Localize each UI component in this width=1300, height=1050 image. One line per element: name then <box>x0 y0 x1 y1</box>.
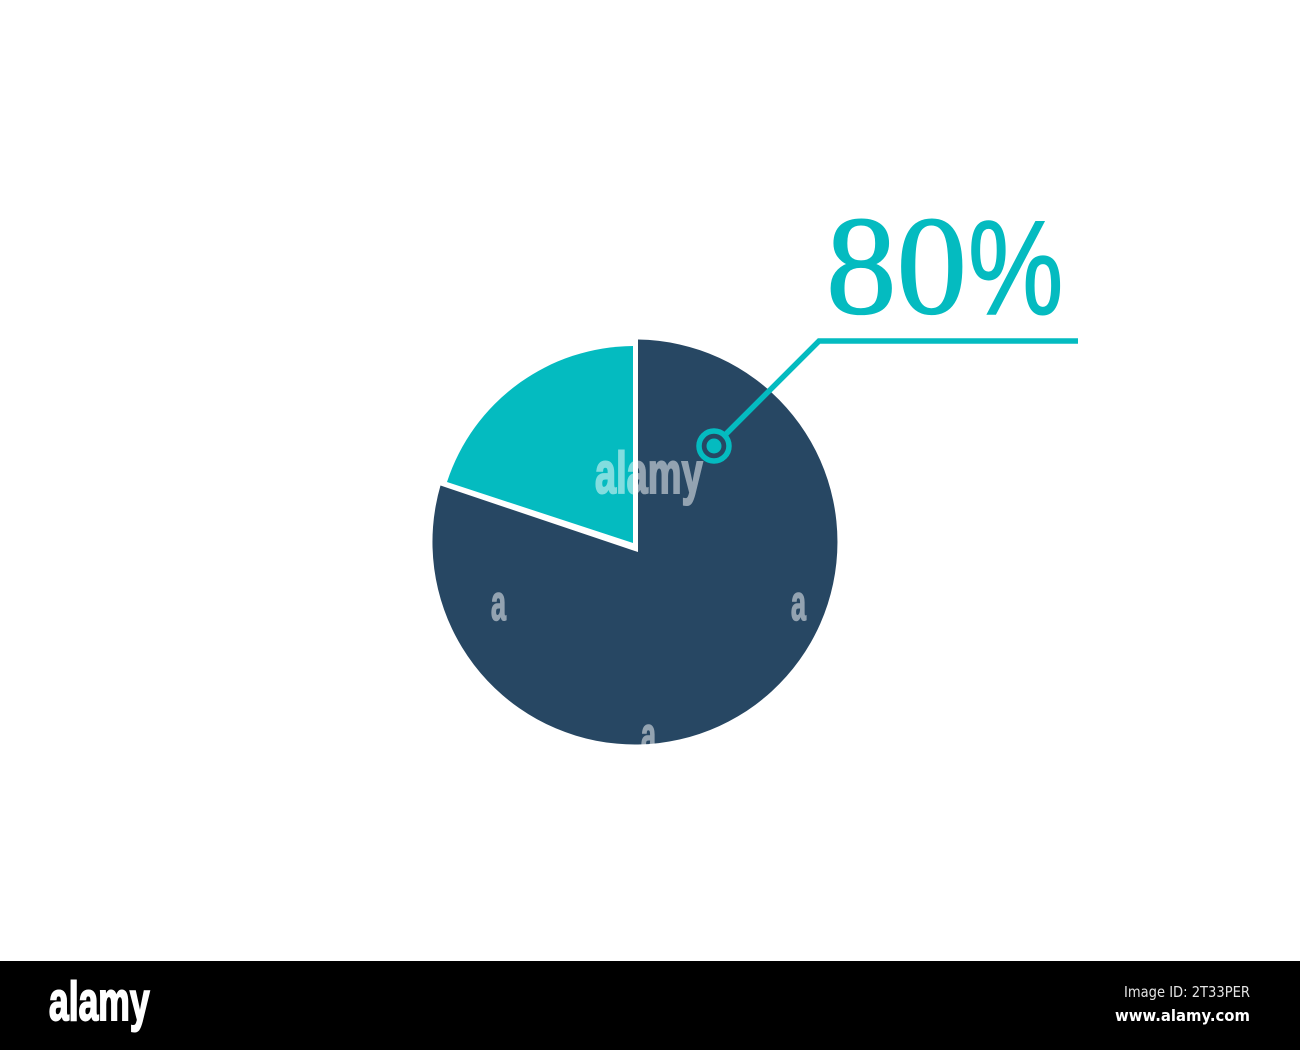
image id: Image ID: 2T33PER <box>1124 983 1250 1001</box>
callout marker ring <box>699 431 729 461</box>
footer logo: alamy <box>49 970 150 1032</box>
watermark: right letter: a <box>791 575 806 631</box>
percentage label: 80 <box>826 188 967 344</box>
callout leader line <box>722 341 1078 438</box>
watermark: bottom letter: a <box>641 707 656 763</box>
footer bar <box>0 961 1300 1050</box>
pie slice: 80% dark navy <box>432 340 837 744</box>
watermark: centre: alamy <box>595 442 703 506</box>
pie slice: 20% teal <box>447 346 633 543</box>
pie chart <box>432 340 837 744</box>
watermark: left letter: a <box>491 575 506 631</box>
percentage label: % <box>968 193 1063 343</box>
website: www.alamy.com <box>1115 1006 1250 1025</box>
percentage label <box>826 188 1063 344</box>
